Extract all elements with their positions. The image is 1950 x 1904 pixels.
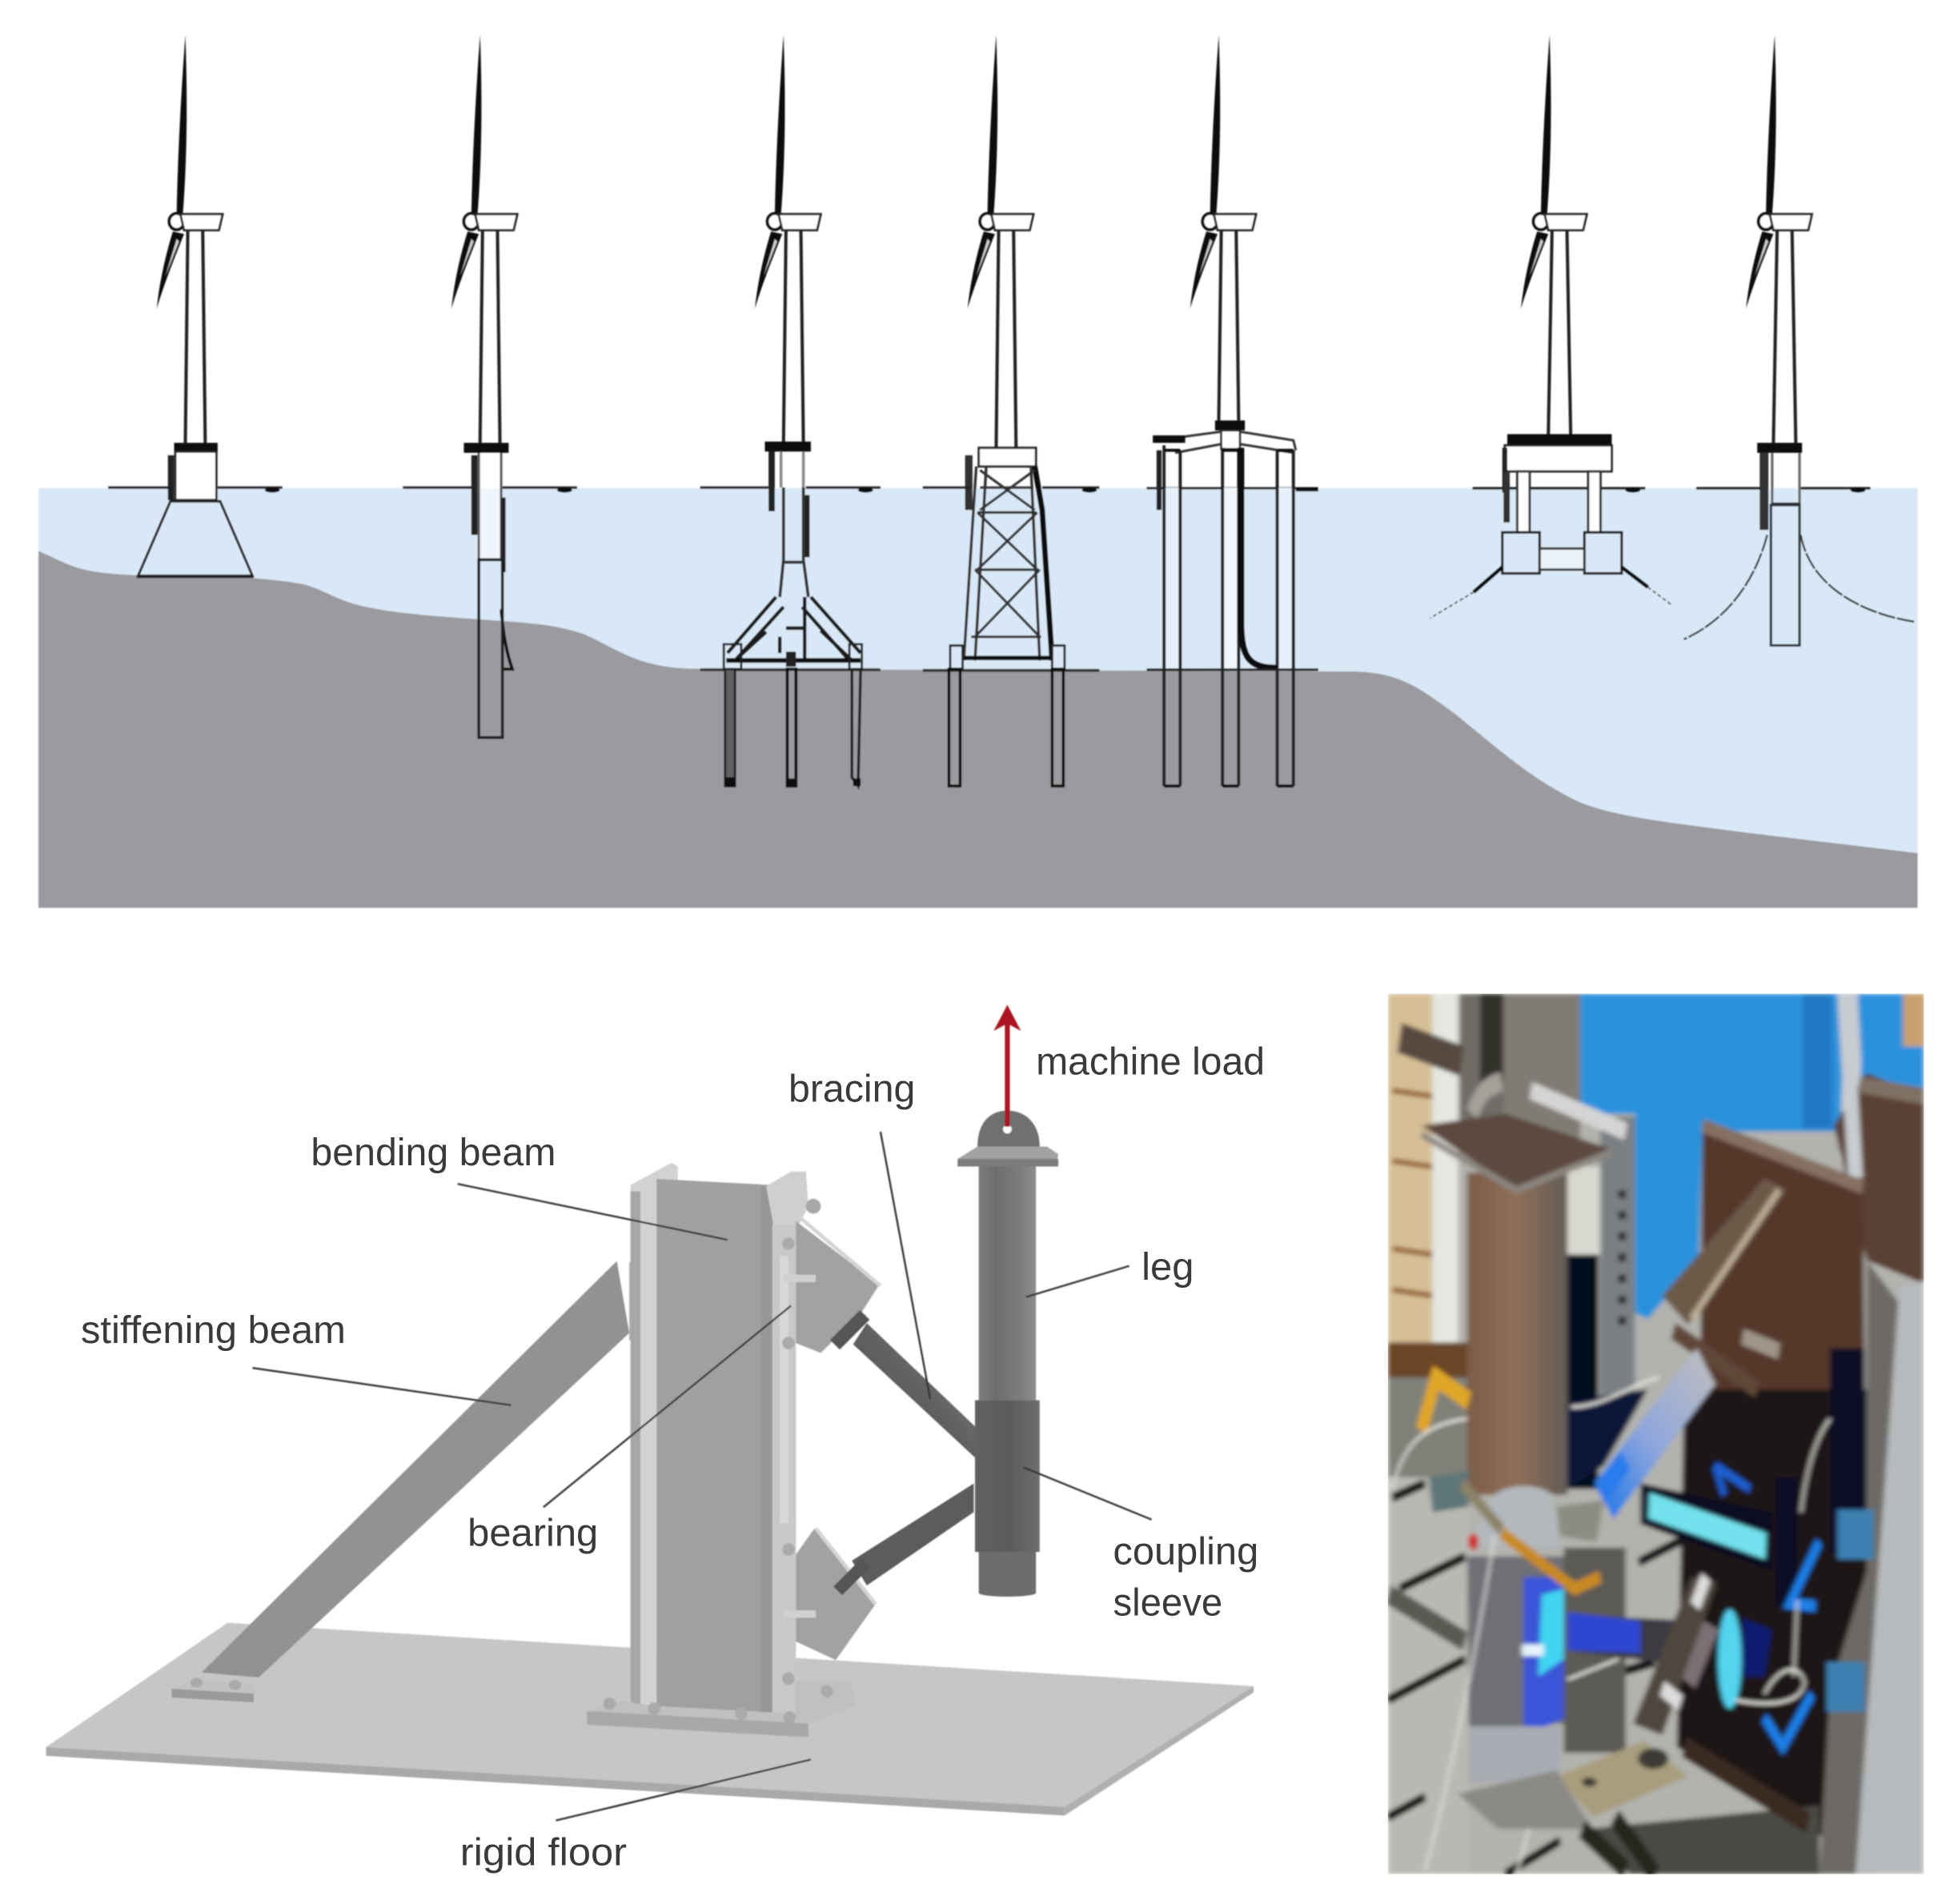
bottom base plate [1556, 1741, 1687, 1818]
turbine 2: monopile [403, 35, 577, 738]
dark blue area [1567, 1389, 1647, 1489]
stiffening beam [171, 1256, 647, 1702]
right rusted plate [1697, 1131, 1868, 1394]
sea water [38, 488, 1918, 908]
turbine 7: spar [1684, 35, 1915, 646]
floor [1388, 1477, 1468, 1874]
lower silver sleeve [1467, 1486, 1560, 1548]
wooden wall [1388, 994, 1435, 1351]
arrow: machine load [993, 1005, 1021, 1127]
blue clips [1715, 1465, 1750, 1495]
turbine 6: semi-submersible [1430, 35, 1673, 618]
rust main column [1467, 1172, 1567, 1495]
wires [1392, 1377, 1830, 1874]
bearing lower [784, 1529, 876, 1660]
label: bracing: bracing [788, 1068, 915, 1111]
right grey sheet [1820, 1261, 1907, 1874]
label: leg: leg [1142, 1245, 1194, 1289]
bending beam column [631, 1163, 821, 1716]
turbine 1: gravity base [108, 35, 283, 576]
label: coupling sleeve: sleeve [1113, 1581, 1222, 1624]
bracing upper [853, 1323, 977, 1459]
side pipe [1399, 1038, 1462, 1061]
label: coupling sleeve: coupling [1113, 1530, 1258, 1573]
label: bending beam: bending beam [311, 1131, 556, 1174]
bracing lower [852, 1484, 973, 1585]
yellow pipes [1502, 1533, 1600, 1589]
joint block [1556, 1501, 1604, 1541]
turbine 3: tripod [700, 35, 881, 788]
dark steel square upper [1456, 994, 1507, 1124]
column behind [1564, 1548, 1626, 1753]
flange plate [1422, 1114, 1611, 1190]
silver tube [1604, 1366, 1706, 1501]
brace bottom [1579, 1615, 1678, 1665]
grey ruler column [1567, 1167, 1600, 1255]
label: stiffening beam: stiffening beam [81, 1309, 346, 1352]
label: bearing: bearing [467, 1511, 598, 1554]
right box frame [1834, 1073, 1924, 1284]
base plate [587, 1682, 856, 1738]
label: machine load: machine load [1036, 1040, 1265, 1084]
label: rigid floor: rigid floor [460, 1831, 627, 1874]
label: coupling sleeve [1113, 1530, 1258, 1624]
bearing upper [784, 1217, 881, 1353]
turbine 4: jacket [923, 35, 1099, 786]
specimen leg [957, 1111, 1058, 1597]
leader lines [252, 1132, 1152, 1821]
angle bracket [1663, 1178, 1787, 1325]
rigid floor plate [46, 1623, 1254, 1815]
panel: photo of test setup [1388, 994, 1925, 1874]
blue cabinet [1580, 994, 1924, 1319]
seabed [38, 551, 1918, 908]
turbine 5: tripile [1146, 35, 1318, 786]
panel: offshore foundation types [38, 35, 1918, 908]
black sensor strip [1830, 1349, 1865, 1553]
panel: CAD model of test rig [46, 1005, 1254, 1821]
lower chord [1467, 1557, 1564, 1730]
